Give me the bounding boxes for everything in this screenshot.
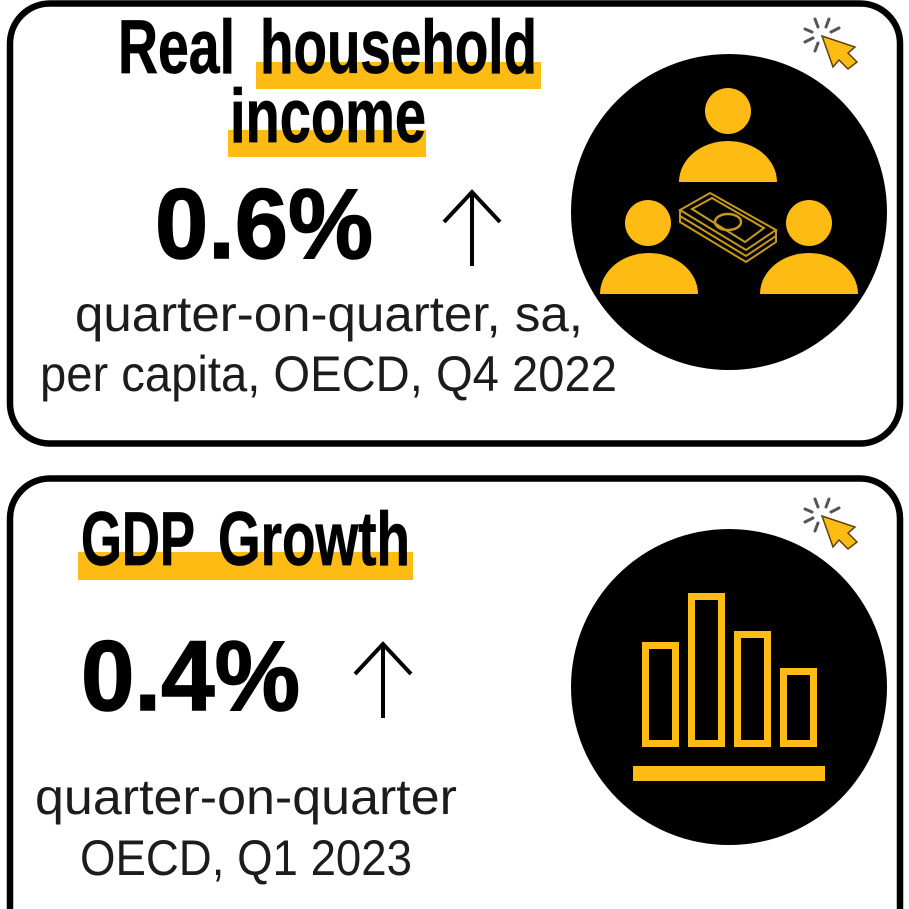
- figure: 0.6%: 0.6%: [155, 168, 373, 279]
- text block: description: quarter-on-quarter, sa,: [75, 286, 583, 342]
- text block: description: [40, 286, 617, 402]
- figure: 0.4%: 0.4%: [81, 620, 300, 731]
- heading: real household income: income: [230, 74, 426, 159]
- text block: description: per capita, OECD, Q4 2022: [40, 346, 617, 402]
- heading: real household income: [118, 5, 541, 159]
- icon: cursor click: [805, 499, 857, 549]
- panel: real household income: [10, 4, 900, 444]
- heading: real household income: Real: [118, 5, 235, 90]
- heading: gdp growth: GDP: [81, 497, 195, 582]
- panel: gdp growth: [10, 478, 900, 909]
- text block: description: [35, 769, 457, 886]
- icon: cursor click: [805, 19, 857, 69]
- heading: gdp growth: Growth: [218, 497, 410, 582]
- icon: people and money: [571, 54, 887, 370]
- heading: gdp growth: [78, 497, 413, 582]
- heading: real household income: household: [260, 5, 537, 90]
- arrow: up: [355, 644, 411, 718]
- arrow: up: [444, 192, 500, 266]
- icon: bar chart: [571, 529, 887, 845]
- text block: description: quarter-on-quarter: [35, 769, 457, 825]
- text block: description: OECD, Q1 2023: [80, 830, 412, 886]
